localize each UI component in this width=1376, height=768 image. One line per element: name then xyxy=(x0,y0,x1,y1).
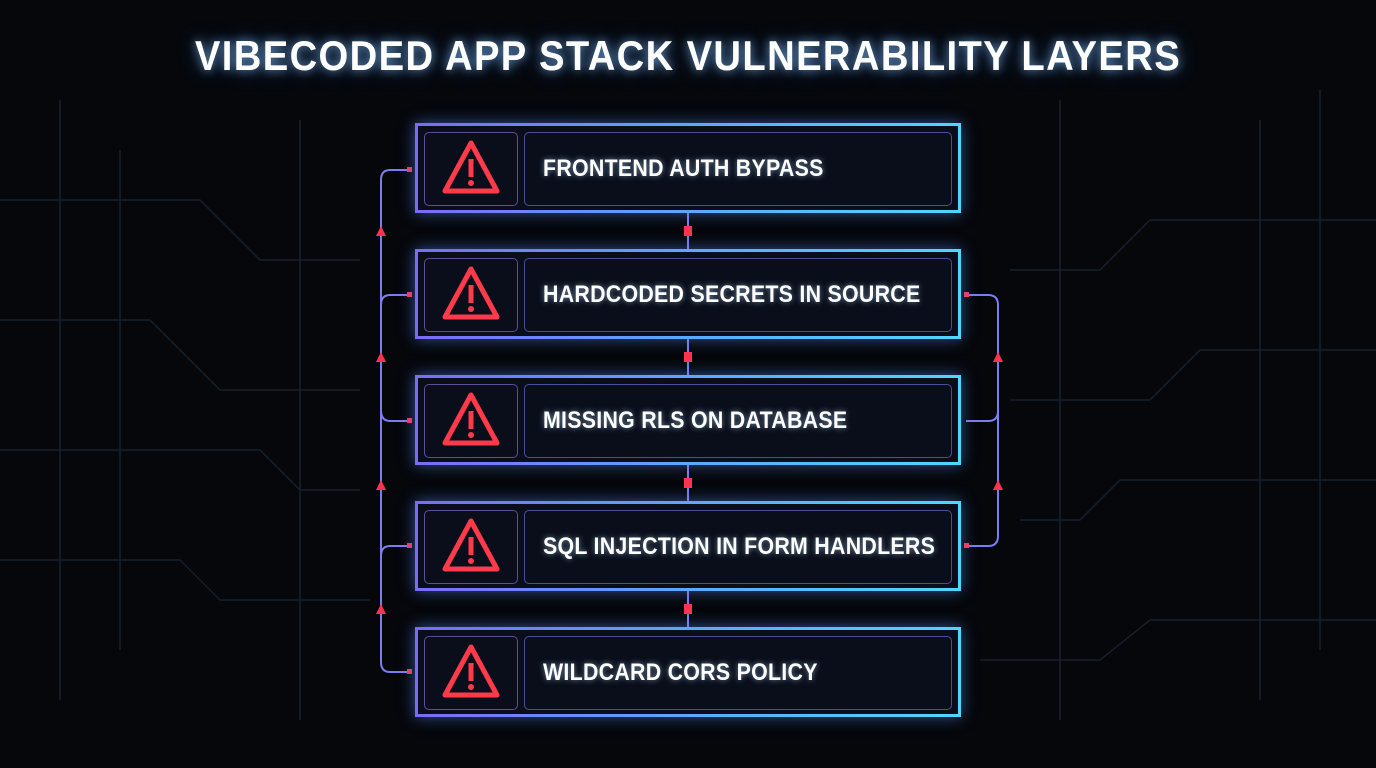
panel: missing rls xyxy=(415,375,961,465)
icon: warning xyxy=(442,140,500,194)
panel: sql injection xyxy=(415,501,961,591)
panel: missing rls: MISSING RLS ON DATABASE xyxy=(543,407,847,434)
panel: frontend auth bypass xyxy=(415,123,961,213)
panel: frontend auth bypass: FRONTEND AUTH BYPASS xyxy=(543,155,824,182)
panel: hardcoded secrets: HARDCODED SECRETS IN SOURCE xyxy=(543,281,920,308)
panel: hardcoded secrets xyxy=(415,249,961,339)
panel: wildcard cors xyxy=(415,627,961,717)
icon: warning xyxy=(442,518,500,572)
panel: sql injection: SQL INJECTION IN FORM HANDLERS xyxy=(543,533,935,560)
panel: wildcard cors: WILDCARD CORS POLICY xyxy=(543,659,818,686)
icon: warning xyxy=(442,392,500,446)
icon: warning xyxy=(442,266,500,320)
icon: warning xyxy=(442,644,500,698)
title: VIBECODED APP STACK VULNERABILITY LAYERS xyxy=(195,32,1181,79)
